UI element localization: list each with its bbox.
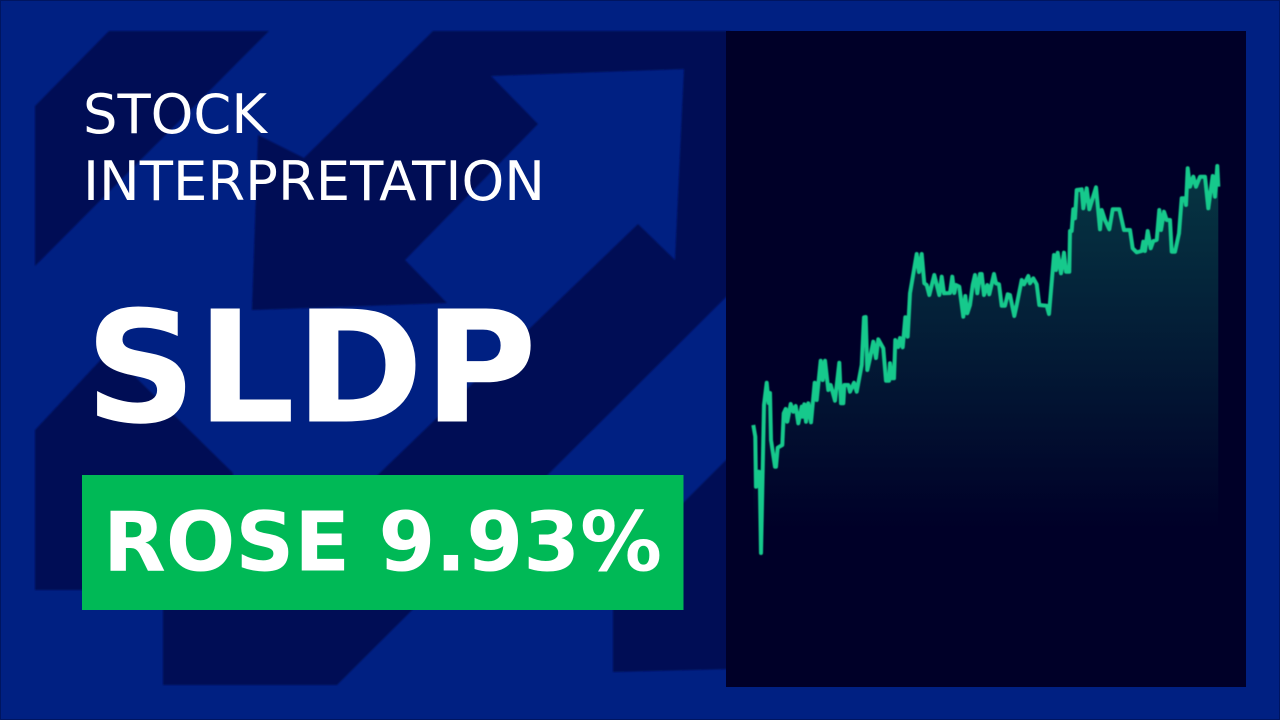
price line	[753, 166, 1218, 553]
background arrows	[35, 31, 730, 685]
title: INTERPRETATION	[83, 150, 545, 213]
title	[83, 83, 545, 213]
change badge	[82, 475, 684, 610]
area fill	[753, 166, 1218, 553]
change badge: ROSE 9.93%	[103, 496, 662, 590]
title: STOCK	[83, 83, 269, 146]
chart panel	[726, 31, 1246, 687]
ticker: SLDP	[85, 278, 537, 458]
